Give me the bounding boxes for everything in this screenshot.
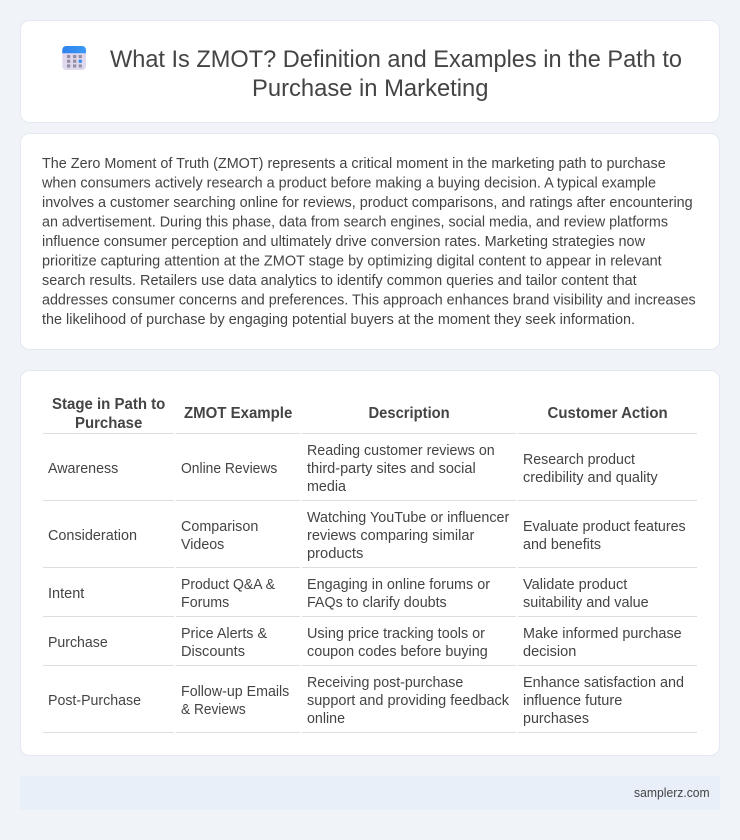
text block: ZMOT definition: The Zero Moment of Truth (ZMOT) represents a critical moment in the marketing path to purchase	[42, 156, 666, 172]
table row: Post-Purchase	[48, 675, 684, 727]
table row: Purchase: decision	[523, 644, 576, 660]
table row: Post-Purchase: Receiving post-purchase	[307, 675, 463, 691]
table row: Intent: Engaging in online forums or	[307, 577, 490, 593]
table row: Intent	[48, 577, 649, 611]
table row: Consideration: Consideration	[48, 528, 137, 544]
text block: ZMOT definition: influence consumer perception and ultimately drive conversion rates. Marketing strategies now	[42, 234, 645, 250]
text block: ZMOT definition: the likelihood of purchase by engaging potential buyers at the moment they seek information.	[42, 312, 635, 328]
table row: Intent: Forums	[181, 595, 229, 611]
table row: Awareness	[48, 443, 658, 495]
table header row	[52, 396, 668, 432]
table row: Post-Purchase: purchases	[523, 711, 589, 727]
text block: ZMOT definition: search results. Retailers use data analytics to identify common queries and tailor content that	[42, 273, 637, 289]
table row: Purchase: coupon codes before buying	[307, 644, 488, 660]
title: What Is ZMOT? Definition and Examples in the Path to	[110, 46, 682, 73]
footer: samplerz.com	[634, 785, 710, 800]
table header row: Stage in Path to	[52, 396, 166, 413]
icon: calendar	[62, 46, 86, 70]
table row: Consideration: products	[307, 546, 363, 562]
text block: ZMOT definition: addresses consumer concerns and preferences. This approach enhances brand visibility and increases	[42, 292, 696, 308]
table row: Awareness: Research product	[523, 452, 635, 468]
table header row: Purchase	[75, 415, 142, 432]
table row: Consideration: and benefits	[523, 537, 601, 553]
table row: Post-Purchase: online	[307, 711, 345, 727]
title: Purchase in Marketing	[252, 75, 488, 102]
table row: Intent: FAQs to clarify doubts	[307, 595, 447, 611]
table header row: Customer Action	[548, 405, 668, 422]
text block: ZMOT definition: prioritize capturing attention at the ZMOT stage by optimizing digital content to appear in relevant	[42, 254, 662, 270]
table row: Purchase: Discounts	[181, 644, 245, 660]
table row: Consideration: Watching YouTube or influencer	[307, 510, 509, 526]
table row: Post-Purchase: Post-Purchase	[48, 693, 141, 709]
table row: Post-Purchase: influence future	[523, 693, 622, 709]
table row: Purchase: Using price tracking tools or	[307, 626, 485, 642]
table row: Consideration: reviews comparing similar	[307, 528, 474, 544]
text block: ZMOT definition: involves a customer searching online for reviews, product comparisons, and ratings after encountering	[42, 195, 693, 211]
table row: Purchase: Make informed purchase	[523, 626, 682, 642]
footer	[20, 776, 720, 810]
table row: Post-Purchase: & Reviews	[181, 702, 246, 718]
table row: Awareness: media	[307, 479, 347, 495]
table row: Intent: Validate product	[523, 577, 627, 593]
table row: Purchase: Price Alerts &	[181, 626, 267, 642]
table row: Awareness: Online Reviews	[181, 461, 277, 477]
table row: Post-Purchase: Enhance satisfaction and	[523, 675, 684, 691]
table row: Awareness: third-party sites and social	[307, 461, 476, 477]
table row: Awareness: credibility and quality	[523, 470, 658, 486]
table row: Consideration: Evaluate product features	[523, 519, 686, 535]
table row: Consideration	[48, 510, 686, 562]
panel: ZMOT table	[20, 370, 720, 756]
table header row: Description	[368, 405, 450, 422]
table row: Consideration: Comparison	[181, 519, 258, 535]
table row: Purchase: Purchase	[48, 635, 108, 651]
table row: Intent: Product Q&A &	[181, 577, 275, 593]
table row: Awareness: Awareness	[48, 461, 118, 477]
text block: ZMOT definition: when consumers actively research a product before making a buying decision. A typical example	[41, 176, 656, 192]
table row: Post-Purchase: support and providing feedback	[307, 693, 510, 709]
table row: Post-Purchase: Follow-up Emails	[181, 684, 289, 700]
table row: Intent: Intent	[48, 586, 84, 602]
table header row: ZMOT Example	[184, 405, 292, 422]
table row: Consideration: Videos	[181, 537, 224, 553]
text block: ZMOT definition	[41, 156, 696, 328]
title panel	[20, 20, 720, 122]
table row: Purchase	[48, 626, 682, 660]
title	[110, 46, 682, 102]
panel: introduction paragraph	[20, 134, 720, 350]
text block: ZMOT definition: an advertisement. During this phase, data from search engines, social media, and review platforms	[42, 214, 668, 230]
table row: Awareness: Reading customer reviews on	[307, 443, 495, 459]
table row: Intent: suitability and value	[523, 595, 649, 611]
